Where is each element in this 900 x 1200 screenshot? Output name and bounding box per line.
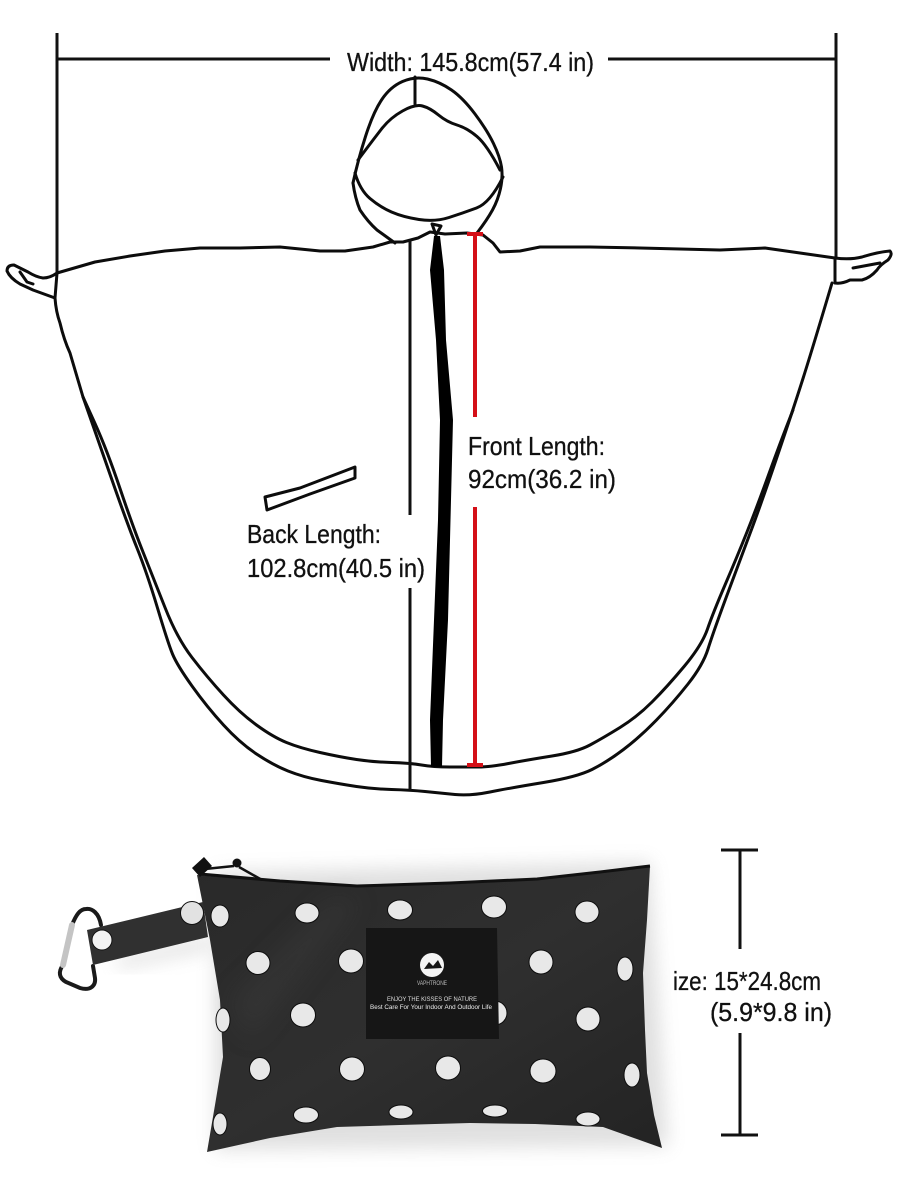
chest pocket: [265, 467, 355, 510]
back length label: 102.8cm(40.5 in): [247, 553, 425, 583]
brand label: Best Care For Your Indoor And Outdoor Life: [370, 1004, 492, 1011]
width label: Width: 145.8cm(57.4 in): [347, 47, 594, 77]
back length label: [247, 519, 425, 583]
back length line: [408, 240, 412, 790]
pouch size label: (5.9*9.8 in): [710, 997, 832, 1027]
front length red line: [467, 234, 483, 765]
polka dots: [211, 896, 640, 1135]
pouch size label: ize: 15*24.8cm: [673, 966, 821, 996]
pouch body: [197, 866, 662, 1152]
strap: [87, 902, 208, 965]
brand label: VAPHTRONE: [417, 981, 447, 987]
brand label: [366, 928, 499, 1039]
back length label: Back Length:: [247, 519, 381, 549]
front length label: Front Length:: [468, 431, 605, 461]
front length label: [468, 431, 616, 494]
width dimension: [57, 33, 836, 273]
left wing tab: [7, 265, 57, 298]
carabiner clip: [60, 909, 101, 989]
pouch height dimension: [721, 850, 758, 1135]
storage pouch: [87, 857, 668, 1152]
hood: [353, 77, 503, 243]
centre zipper: [430, 236, 453, 767]
poncho body outline: [55, 232, 835, 795]
brand label: ENJOY THE KISSES OF NATURE: [387, 996, 478, 1003]
right wing tab: [835, 251, 891, 283]
poncho line drawing: [7, 77, 891, 795]
fabric sheen: [230, 900, 360, 1040]
pouch size label: [673, 966, 832, 1027]
zipper pull: [192, 857, 650, 886]
front length label: 92cm(36.2 in): [468, 464, 616, 494]
